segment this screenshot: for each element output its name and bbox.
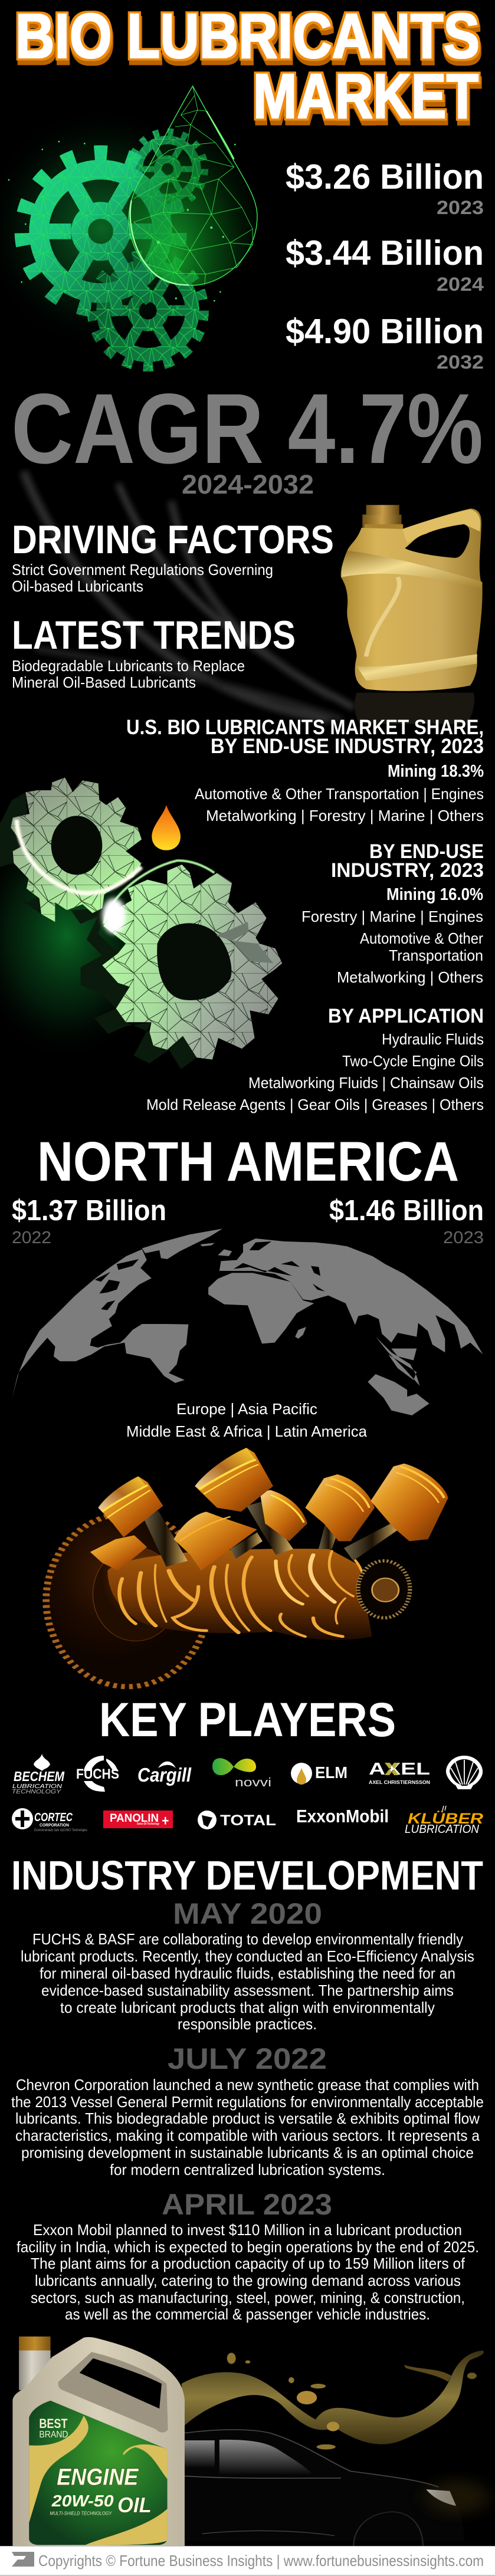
text: May 2020 development: lubricant products. Recently, they conducted an Eco-Efficiency Analysis (21, 1947, 474, 1965)
footer (0, 2546, 495, 2576)
southeast Asian islands (376, 1337, 420, 1386)
text: latest trends detail: Mineral Oil-Based Lubricants (12, 673, 196, 691)
Eurasia (219, 1238, 483, 1355)
text: U.S. segments: Metalworking | Forestry | Marine | Others (206, 807, 484, 824)
date: April 2023: APRIL 2023 (162, 2188, 332, 2221)
text: April 2023 development: lubricants annually, catering to the growing demand across various (35, 2272, 461, 2289)
logo: Cortec: CORTEC (34, 1811, 73, 1824)
Greenland (142, 1228, 222, 1259)
logo: Kluber Lubrication (405, 1806, 483, 1836)
piston rings (102, 1460, 444, 1541)
rear and lower pistons (90, 1490, 307, 1570)
text: driving factors detail (12, 561, 273, 595)
heading: U.S. market share (126, 716, 484, 758)
logo: Bechem: BECHEM (14, 1769, 65, 1784)
title (15, 0, 480, 132)
Canadian bays and lakes (94, 1259, 139, 1340)
text: April 2023 development: as well as the commercial & passenger vehicle industries. (65, 2305, 430, 2323)
logo: Kluber Lubrication: LUBRICATION (405, 1823, 480, 1836)
text: application segments: Hydraulic Fluids (382, 1030, 484, 1048)
text: July 2022 development: for modern centralized lubrication systems. (110, 2161, 385, 2179)
logos: key players (12, 1754, 483, 1836)
heading: by application: BY APPLICATION (328, 1005, 484, 1027)
text: latest trends detail: Biodegradable Lubricants to Replace (12, 657, 245, 675)
text: May 2020 development: FUCHS & BASF are collaborating to develop environmentally friendly (32, 1930, 463, 1948)
text: May 2020 development: evidence-based sustainability assessment. The partnership aims (41, 1982, 454, 1999)
illustration: gold lubricant jug (341, 505, 483, 724)
heading: by end-use industry: INDUSTRY, 2023 (331, 859, 484, 882)
label text: BEST (39, 2416, 67, 2431)
text: end-use segments: Automotive & Other (360, 929, 483, 947)
logo: Total (198, 1811, 276, 1829)
text: U.S. segments: Mining 18.3% (388, 762, 484, 781)
text: application segments: Two-Cycle Engine Oils (342, 1052, 484, 1070)
stat: market value 2024: 2024 (437, 274, 484, 295)
crankshaft body (107, 1549, 372, 1640)
logo: Panolin (103, 1811, 173, 1828)
bottle label (29, 2401, 168, 2545)
text: other regions: Europe | Asia Pacific (176, 1400, 317, 1418)
text: end-use segments: Forestry | Marine | Engines (301, 908, 483, 925)
text: April 2023 development: The plant aims for a production capacity of up to 159 Million liters of (31, 2255, 466, 2272)
jug handle opening (405, 524, 470, 558)
logo: ELM (291, 1763, 348, 1785)
front pistons (98, 1448, 448, 1541)
world map (12, 1228, 483, 1415)
logo: Cortec: Environmentally Safe VpCI/MCI Technologies (34, 1829, 87, 1832)
stat: North America 2023 (329, 1195, 484, 1247)
rear gear (357, 1560, 411, 1619)
icon: top small gear (130, 132, 205, 206)
label text: OIL (117, 2493, 152, 2517)
text: May 2020 development: for mineral oil-based hydraulic fluids, establishing the need for an (40, 1964, 455, 1982)
stat: market value 2023: $3.26 Billion (286, 157, 484, 196)
jug highlights (342, 510, 482, 681)
text: driving factors detail: Oil-based Lubricants (12, 577, 143, 595)
large gear (102, 865, 282, 1060)
text: end-use segments: Mining 16.0% (386, 885, 483, 904)
text: April 2023 development: sectors, such as manufacturing, steel, power, mining, & construction, (31, 2289, 465, 2306)
icon: glowing oil drop (129, 86, 257, 285)
text: May 2020 development: to create lubricant products that align with environmentally (60, 1999, 435, 2016)
logo: Fuchs (76, 1756, 119, 1792)
heading: latest trends: LATEST TRENDS (12, 613, 296, 658)
logo: Fuchs: FUCHS (76, 1766, 119, 1782)
stat: market value 2032 (286, 312, 484, 373)
CAGR period: 2024-2032 (182, 469, 314, 500)
illustration: car, oil splash and engine oil bottle (12, 2337, 489, 2547)
connecting rods (142, 1502, 400, 1567)
logo: ELM: ELM (315, 1763, 348, 1782)
stat: market value 2023: 2023 (437, 197, 484, 218)
heading: by end-use industry (331, 840, 484, 882)
Mediterranean and inland seas (234, 1241, 325, 1292)
stat: market value 2023 (286, 157, 484, 218)
logo: Bechem: TECHNOLOGY (12, 1789, 62, 1795)
piston crowns (98, 1448, 255, 1512)
text: end-use segments: Transportation (389, 947, 483, 964)
car silhouette (185, 2430, 489, 2547)
label swirl (29, 2416, 168, 2545)
text: end-use segments: Metalworking | Others (337, 968, 483, 986)
text: other regions: Middle East & Africa | Latin America (126, 1422, 368, 1440)
text: U.S. segments (195, 762, 484, 824)
logo: Panolin: PANOLIN (110, 1812, 159, 1825)
logo: Novvi: novvi (235, 1776, 271, 1789)
glowing arcs (17, 820, 214, 934)
text: April 2023 development (17, 2221, 479, 2323)
text: July 2022 development: lubricants. This biodegradable product is versatile & exhibits optimal flow (15, 2110, 480, 2127)
text: other regions (126, 1400, 368, 1440)
stat: North America 2023: $1.46 Billion (329, 1195, 484, 1227)
stat: market value 2024 (286, 234, 484, 295)
bottle (12, 2337, 185, 2546)
logo: Bechem: LUBRICATION (12, 1783, 63, 1790)
jug cap (362, 505, 403, 530)
logo: Panolin: Swiss Oil Technology (137, 1822, 159, 1826)
text: July 2022 development: promising development in sustainable lubricants & is an optimal choice (21, 2144, 474, 2161)
shadow gear wireframes (0, 792, 196, 1069)
logo: Axel Christiernsson (369, 1760, 430, 1785)
stat: North America 2022 (12, 1195, 166, 1247)
text: July 2022 development: characteristics, making it compatible with various sectors. It represents a (15, 2127, 480, 2144)
small gear (11, 777, 142, 922)
label text: 20W-50 (51, 2492, 114, 2510)
oil splash (182, 2350, 484, 2472)
flywheel (44, 1512, 211, 1688)
text: application segments: Metalworking Fluids | Chainsaw Oils (248, 1074, 484, 1092)
crankshaft discs (119, 1551, 362, 1637)
heading: by end-use industry: BY END-USE (369, 840, 484, 863)
logo: Cortec (12, 1808, 87, 1832)
text: May 2020 development: responsible practices. (178, 2015, 317, 2033)
label text (39, 2416, 152, 2517)
logo: Total: TOTAL (220, 1812, 276, 1829)
icon: large central gear (22, 153, 179, 310)
jug body (341, 508, 483, 691)
text: U.S. segments: Automotive & Other Transportation | Engines (195, 785, 484, 803)
text: July 2022 development (11, 2076, 484, 2179)
stat: North America 2022: 2022 (12, 1228, 51, 1247)
text: application segments (146, 1030, 484, 1113)
date: May 2020: MAY 2020 (173, 1897, 322, 1930)
logo: Novvi (212, 1758, 271, 1789)
text: April 2023 development: Exxon Mobil planned to invest $110 Million in a lubricant production (33, 2221, 462, 2239)
illustration: golden engine crankshaft (44, 1448, 448, 1688)
Iceland (201, 1243, 215, 1246)
stat: market value 2024: $3.44 Billion (286, 234, 484, 272)
label text: BRAND (39, 2429, 68, 2440)
icon: bottom gear (92, 255, 204, 367)
text: application segments: Mold Release Agents | Gear Oils | Greases | Others (146, 1096, 484, 1113)
British Isles (218, 1249, 232, 1256)
sparks (8, 141, 236, 301)
logo: Cargill: Cargill (137, 1764, 192, 1786)
Africa (208, 1273, 314, 1343)
text: May 2020 development (21, 1930, 474, 2033)
logo: ExxonMobil: ExxonMobil (296, 1806, 389, 1826)
stat: market value 2032: 2032 (437, 351, 484, 373)
logo: Axel Christiernsson: AXEL (369, 1760, 430, 1779)
illustration: green gears and oil drop (0, 86, 257, 367)
logo: Kluber Lubrication: KLÜBER (408, 1810, 483, 1827)
stat: market value 2032: $4.90 Billion (286, 312, 484, 351)
label text: ENGINE (57, 2464, 139, 2490)
heading: key players: KEY PLAYERS (99, 1693, 396, 1747)
the Americas (12, 1249, 188, 1399)
logo: Cortec: CORPORATION (40, 1823, 69, 1828)
illustration: polygon gears with oil drop (0, 777, 282, 1069)
Australia (368, 1374, 430, 1415)
logo: Bechem (12, 1754, 65, 1795)
text: latest trends detail (12, 657, 245, 691)
heading: U.S. market share: BY END-USE INDUSTRY, 2023 (211, 735, 484, 758)
text: end-use segments (301, 885, 483, 986)
jug reflection (355, 692, 474, 724)
text: driving factors detail: Strict Government Regulations Governing (12, 561, 273, 579)
logo: Shell (446, 1756, 483, 1789)
heading: driving factors: DRIVING FACTORS (12, 517, 334, 562)
background: dark curtain streaks (24, 472, 354, 719)
date: July 2022: JULY 2022 (168, 2042, 327, 2075)
label text: MULTI-SHIELD TECHNOLOGY (50, 2511, 112, 2516)
icon: Fortune Business Insights logo (12, 2552, 34, 2567)
stat: North America 2023: 2023 (443, 1228, 484, 1247)
stat: North America 2022: $1.37 Billion (12, 1195, 166, 1227)
icon: orange oil drop (152, 805, 181, 850)
Madagascar (295, 1327, 306, 1339)
logo: Axel Christiernsson: AXEL CHRISTIERNSSON (369, 1780, 430, 1785)
